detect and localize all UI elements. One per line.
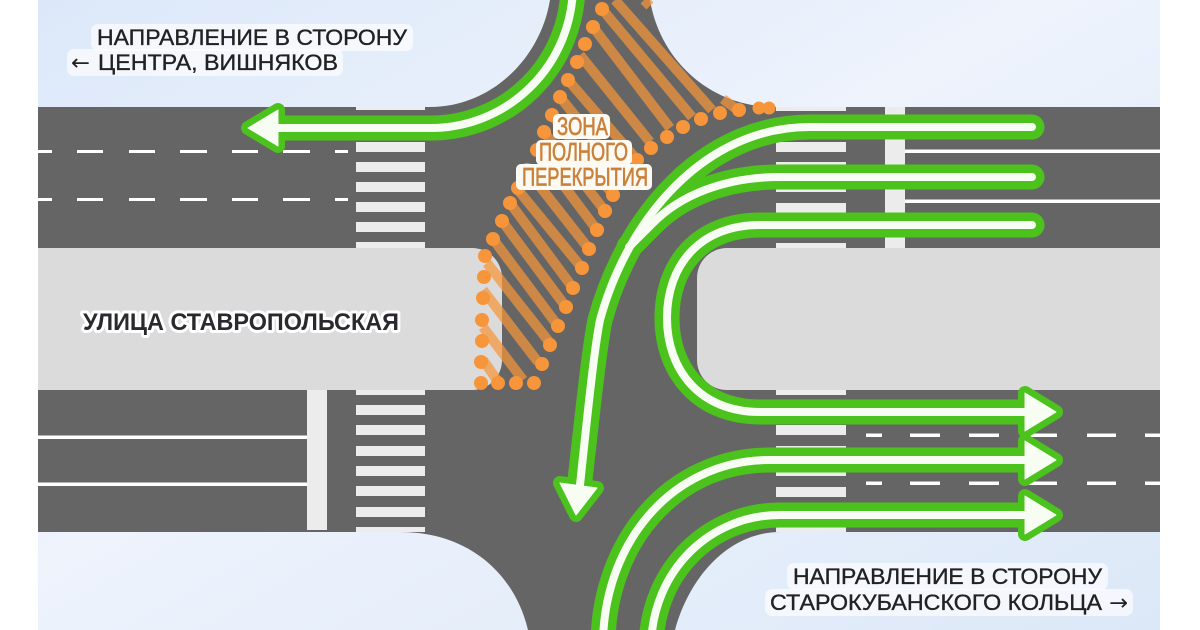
arrow: from south turning east, middle lane xyxy=(603,441,1056,630)
direction label: toward centre xyxy=(67,24,413,76)
street name: УЛИЦА СТАВРОПОЛЬСКАЯ xyxy=(83,309,399,336)
crosswalk: top left xyxy=(356,107,425,248)
median: right xyxy=(697,248,1160,390)
arrow: from south turning east, lower lane xyxy=(651,496,1056,630)
closure zone dotted outline xyxy=(474,2,776,390)
closure zone label: ПОЛНОГО xyxy=(539,138,628,166)
closure zone label xyxy=(516,113,652,192)
crosswalk: bottom left xyxy=(356,390,425,532)
closure zone label: ПЕРЕКРЫТИЯ xyxy=(522,164,648,192)
direction label: toward centre: ← xyxy=(71,51,90,76)
crosswalk: bottom right xyxy=(776,390,846,532)
direction label: toward centre: НАПРАВЛЕНИЕ В СТОРОНУ xyxy=(97,25,408,50)
direction label: toward Starokubanskoe ring: СТАРОКУБАНСКОГО КОЛЬЦА xyxy=(770,590,1102,615)
closure zone hatching xyxy=(483,0,735,380)
closure zone label: ЗОНА xyxy=(557,113,608,141)
crosswalk: top right xyxy=(776,107,846,248)
direction label: toward centre: ЦЕНТРА, ВИШНЯКОВ xyxy=(98,50,338,75)
stop line: top right xyxy=(885,107,905,248)
lane markings xyxy=(38,150,1160,486)
direction label: toward Starokubanskoe ring xyxy=(765,563,1133,616)
direction label: toward Starokubanskoe ring: → xyxy=(1109,591,1128,616)
direction label: toward Starokubanskoe ring: НАПРАВЛЕНИЕ В СТОРОНУ xyxy=(793,564,1103,589)
median: left xyxy=(38,248,502,390)
arrows: from east turning south xyxy=(560,127,1032,515)
arrow: U-turn from east lane back to east xyxy=(667,225,1056,431)
stop line: bottom left xyxy=(307,390,327,530)
arrow: from north turning west xyxy=(248,0,573,146)
